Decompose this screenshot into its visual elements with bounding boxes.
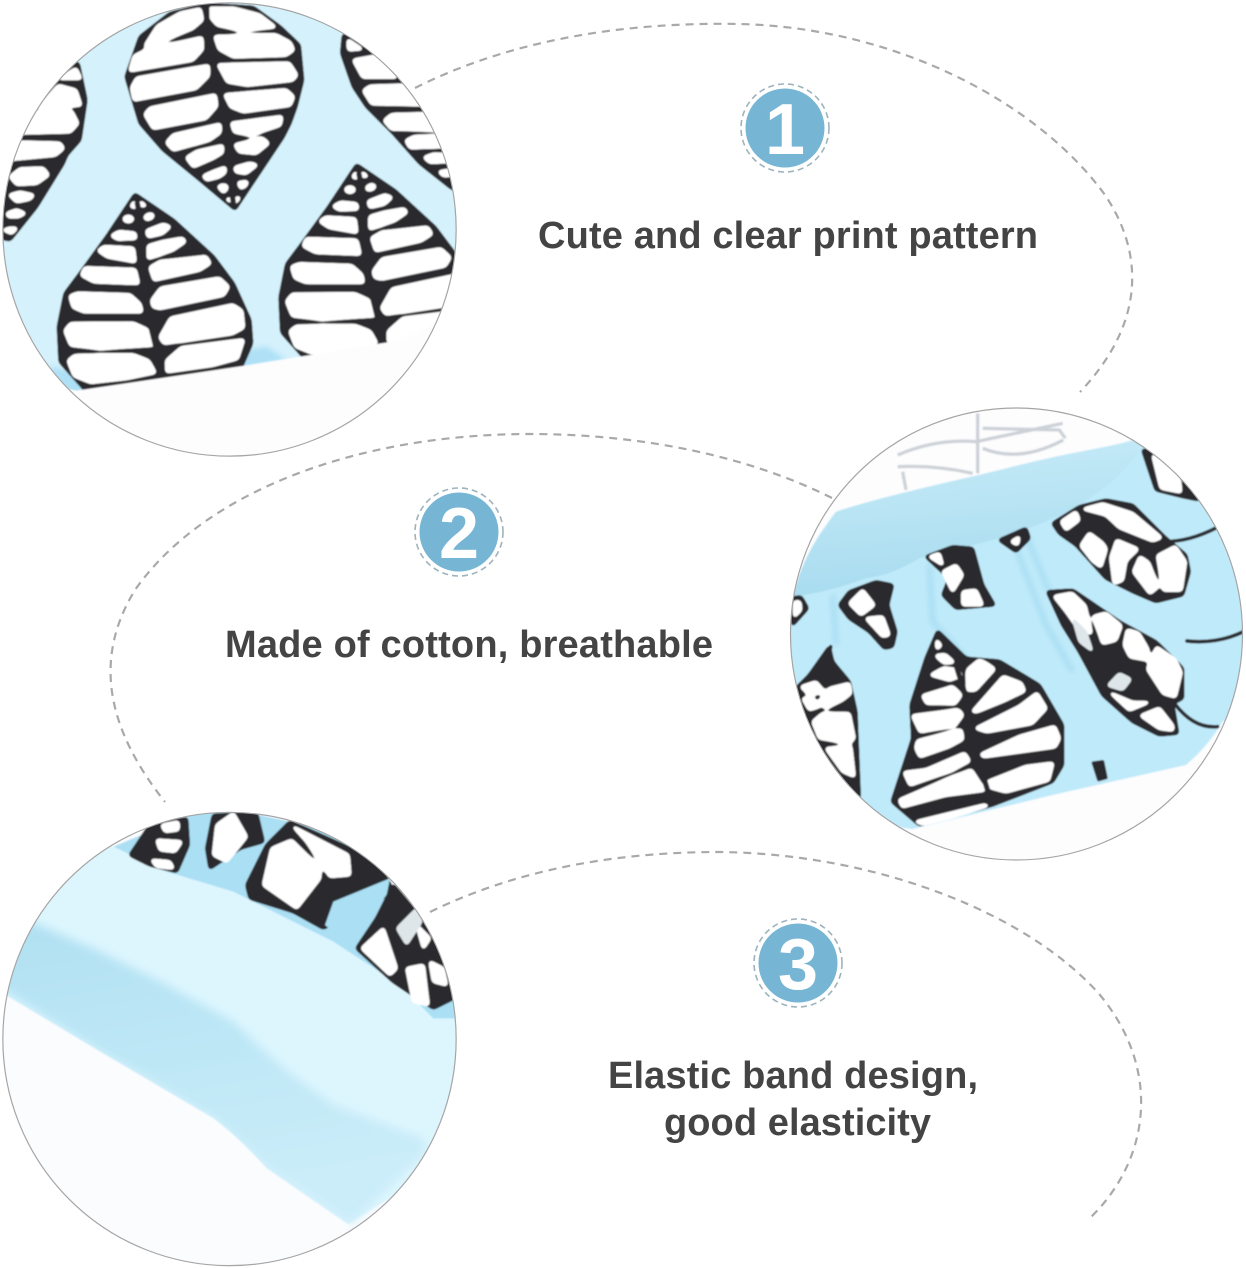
leaf: lower left: [58, 194, 252, 392]
leaf: long folded right: [1047, 590, 1218, 735]
white garment lower edge: [900, 720, 1225, 860]
circle outline: [3, 812, 456, 1266]
left leaf: [796, 647, 859, 798]
mark at edge of print: [1093, 762, 1106, 780]
leaf: top centre: [126, 4, 303, 209]
heading: feature 3: good elasticity: [664, 1102, 931, 1144]
photo circle: waistband fabric: [786, 405, 1246, 872]
heading: feature 1: Cute and clear print pattern: [538, 215, 1038, 257]
dashed connector: feature 2: [111, 434, 832, 802]
badge 3: [754, 919, 842, 1007]
crisp lower edge of fold: [7, 996, 349, 1226]
dashed connector: feature 3: [430, 852, 1141, 1218]
leaf: upper left, clipped: [0, 60, 86, 240]
fabric shadow near fold: [50, 345, 285, 391]
leaf: lower right: [280, 165, 473, 362]
badge 1: 1: [765, 90, 805, 170]
right upper leaf: [1143, 450, 1199, 500]
photo circle: elastic band: [0, 805, 467, 1268]
circle outline: [3, 3, 456, 456]
leaf: upper right, clipped: [339, 34, 452, 192]
heading: feature 3: Elastic band design,: [608, 1055, 978, 1097]
inside of garment with faint print: [796, 408, 1135, 586]
circle outline: [790, 408, 1242, 860]
heading: feature 3: [608, 1055, 978, 1144]
light inner band: [0, 845, 467, 1225]
crumpled leaves along gathers: [791, 528, 1029, 648]
photo circle: print pattern: [0, 0, 483, 467]
heading: feature 2: Made of cotton, breathable: [225, 624, 713, 666]
fabric pleat shading: [833, 535, 1073, 672]
badge 2: 2: [439, 494, 479, 574]
badge 2: [415, 488, 503, 576]
white inside of fabric: [69, 338, 428, 456]
badge 1: [741, 84, 829, 172]
big centre leaf: [892, 631, 1063, 825]
darker fold band: [0, 918, 427, 1225]
stem: right: [1187, 632, 1243, 642]
badge 3: 3: [778, 925, 818, 1005]
dashed connector: feature 1: [415, 24, 1132, 392]
gathered printed fabric: [113, 805, 467, 1018]
waistband: [793, 440, 1141, 597]
leaf: gathered upper right: [1053, 500, 1217, 602]
